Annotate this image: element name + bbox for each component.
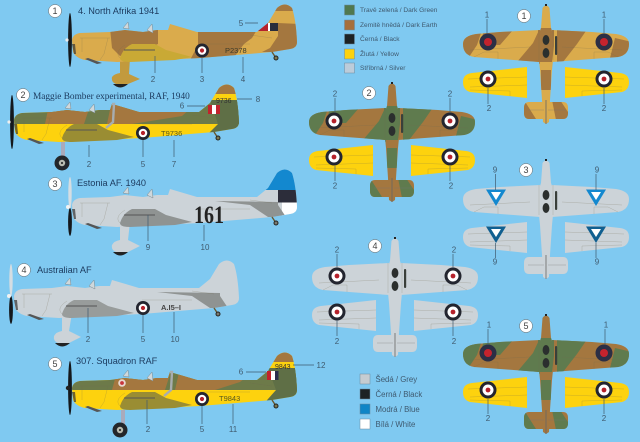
roundel (195, 392, 209, 406)
callouts: 7 (172, 160, 177, 169)
serial T9843: T9843 (219, 394, 240, 403)
fin serial 9736: 9736 (216, 98, 232, 105)
callouts (87, 95, 261, 169)
callouts: 8 (256, 95, 261, 104)
landing gear and wheel (54, 138, 70, 170)
badge 5: 5 (52, 359, 58, 369)
panel: aircraft 4 side view, Australian AF (7, 260, 239, 346)
swatch: dark earth: Zemitě hnědá / Dark Earth (360, 22, 438, 29)
panel: aircraft 3 top and bottom views (463, 159, 629, 279)
callouts: 5 (200, 425, 205, 434)
badge 3: 3 (52, 179, 58, 189)
callouts: 1 (604, 320, 609, 330)
callouts: 9 (493, 166, 498, 174)
callouts: 1 (487, 320, 492, 330)
roundels (480, 34, 612, 88)
callouts: 2 (335, 337, 340, 346)
fuselage in grey (14, 260, 239, 320)
badge 3 (48, 178, 62, 190)
propeller (66, 361, 72, 415)
callouts: 5 (141, 160, 146, 169)
callouts: 9 (146, 243, 151, 252)
callouts: 2 (86, 335, 91, 344)
heading: Australian AF: Australian AF (37, 265, 92, 275)
squadron badge (118, 379, 126, 387)
badge 4 (368, 240, 382, 252)
propeller (66, 177, 72, 236)
callouts: 12 (317, 361, 326, 370)
panel: aircraft 5 top and bottom views (460, 314, 632, 434)
badge 1 (48, 4, 62, 18)
callouts: 2 (333, 90, 338, 98)
legend: upper camouflage colours (344, 5, 438, 73)
callouts: 2 (448, 90, 453, 98)
callouts: 1 (602, 10, 607, 20)
swatch: yellow: Žlutá / Yellow (360, 49, 399, 58)
badge 3: 3 (523, 165, 529, 175)
callouts: 2 (87, 160, 92, 169)
badge 5 (48, 358, 62, 370)
callouts (146, 215, 210, 252)
serial P2378: P2378 (225, 46, 247, 55)
swatch: grey: Šedá / Grey (376, 375, 417, 384)
roundels (326, 112, 458, 166)
callouts: 10 (201, 243, 210, 252)
badge 3 (520, 164, 532, 176)
swatch: dark green: Travě zelená / Dark Green (360, 7, 438, 14)
badge 4: 4 (372, 241, 378, 251)
triangle insignia (486, 190, 606, 243)
swatch: silver: Stříbrná / Silver (360, 65, 406, 72)
callouts (485, 10, 607, 113)
fuselage in silver with Estonian fin (72, 165, 302, 229)
callouts: 6 (239, 368, 244, 376)
heading: Maggie Bomber experimental: Maggie Bomber experimental, RAF, 1940 (33, 92, 190, 102)
fin flash (208, 105, 220, 114)
roundel (136, 126, 150, 140)
badge 1: 1 (52, 6, 58, 16)
airframe (306, 82, 478, 202)
callouts: 2 (146, 425, 151, 434)
badge 4: 4 (21, 265, 27, 275)
callouts: 2 (602, 104, 607, 113)
callouts (333, 90, 454, 190)
callouts: 2 (487, 104, 492, 113)
landing gear (54, 313, 81, 346)
airframe (460, 314, 632, 434)
swatch: black: Černá / Black (376, 390, 422, 399)
legend: lower colours (360, 374, 422, 429)
badge 1 (518, 10, 530, 22)
callouts: 2 (452, 337, 457, 346)
propeller (7, 95, 14, 149)
heading: 4. North Afrika 1941: 4. North Afrika 1941 (78, 6, 159, 16)
panel: aircraft 4 top and bottom views (312, 237, 478, 357)
roundels (480, 344, 612, 398)
callouts: 9 (493, 258, 498, 266)
airframe (312, 237, 478, 357)
callouts: 11 (229, 425, 238, 434)
badge 2 (362, 86, 376, 100)
callouts: 2 (449, 182, 454, 190)
panel: aircraft 2 top and bottom views (306, 82, 478, 202)
roundels (328, 268, 462, 320)
badge 4 (18, 264, 30, 276)
landing gear (112, 222, 140, 256)
badge 5: 5 (523, 321, 529, 331)
fuselage with yellow undersides (12, 80, 242, 144)
propeller (65, 13, 72, 67)
badge 2: 2 (366, 88, 372, 98)
fuselage with yellow undersides (70, 348, 300, 412)
serial A.I5-I: A.I5–I (161, 303, 181, 312)
callouts: 9 (595, 166, 600, 174)
panel: aircraft 5 side view, 307 Squadron (48, 348, 326, 438)
callouts: 3 (200, 75, 205, 84)
panel: aircraft 2 side view, Maggie Bomber (7, 80, 261, 170)
code 161: 161 (194, 202, 224, 229)
callouts: 2 (151, 75, 156, 84)
roundel (195, 44, 209, 58)
panel: aircraft 1 top and bottom views (460, 4, 632, 124)
panel: aircraft 3 side view, Estonia (48, 165, 302, 256)
callouts (146, 361, 326, 434)
fuselage with desert camouflage (72, 0, 300, 64)
propeller (7, 264, 13, 324)
landing gear and wheel (112, 410, 128, 438)
callouts: 10 (171, 335, 180, 344)
fin flash (258, 23, 278, 31)
callouts (335, 246, 457, 346)
callouts: 4 (241, 75, 246, 84)
panel: aircraft 1 side view, North Afrika (48, 0, 300, 88)
callouts: 5 (239, 19, 244, 28)
callouts (86, 308, 180, 344)
callouts: 5 (141, 335, 146, 344)
callouts: 2 (602, 414, 607, 423)
callouts: 2 (335, 246, 340, 254)
landing gear (112, 58, 140, 88)
swatch: black: Černá / Black (360, 34, 400, 43)
badge 2 (16, 88, 30, 102)
callouts (486, 320, 609, 423)
callouts: 6 (180, 102, 185, 110)
fin serial 9843: 9843 (275, 364, 291, 371)
airframe (463, 159, 629, 279)
callouts (493, 166, 600, 266)
airframe (460, 4, 632, 124)
fin flash (267, 371, 278, 380)
heading: 307. Squadron RAF: 307. Squadron RAF (76, 356, 158, 366)
callouts: 1 (485, 10, 490, 20)
swatch: blue: Modrá / Blue (376, 405, 420, 414)
heading: Estonia AF. 1940: Estonia AF. 1940 (77, 178, 146, 188)
serial T9736: T9736 (161, 129, 182, 138)
badge 5 (520, 320, 532, 332)
swatch: white: Bílá / White (376, 420, 415, 429)
badge 2: 2 (20, 90, 26, 100)
roundel (136, 301, 150, 315)
callouts: 2 (486, 414, 491, 423)
callouts (151, 19, 258, 84)
callouts: 9 (595, 258, 600, 266)
callouts: 2 (333, 182, 338, 190)
callouts: 2 (452, 246, 457, 254)
badge 1: 1 (521, 11, 527, 21)
